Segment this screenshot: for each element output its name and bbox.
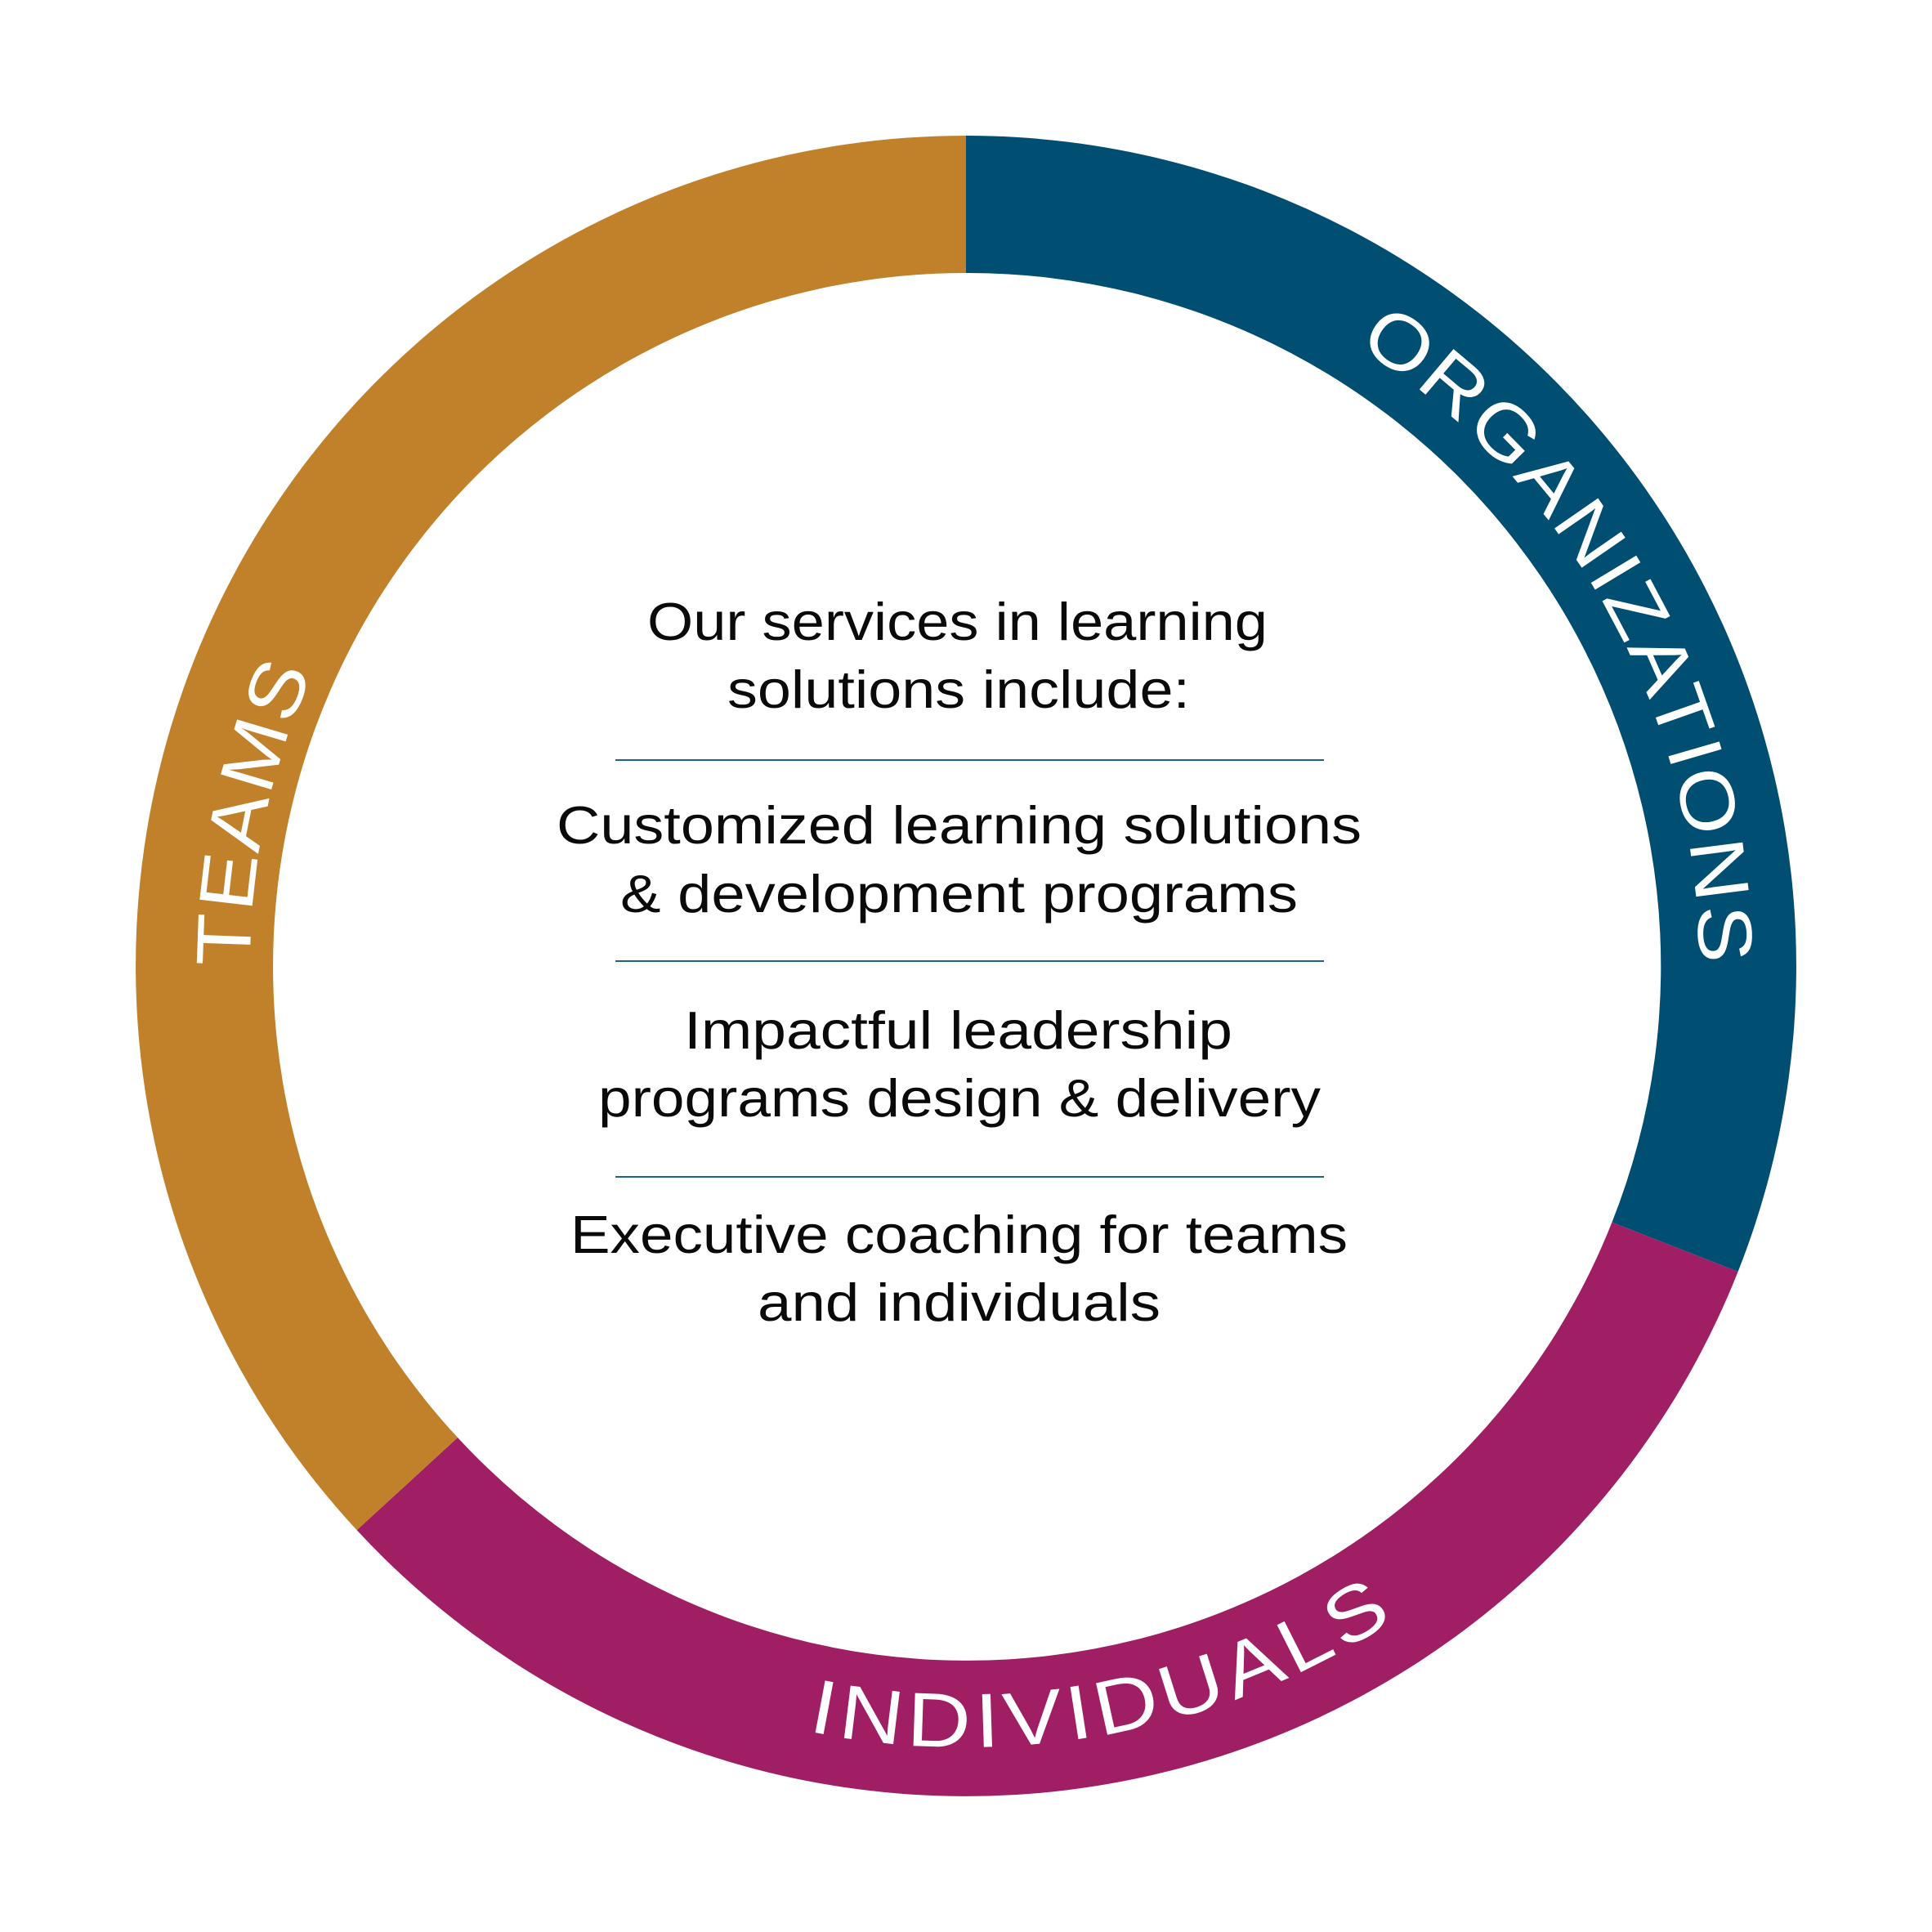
- intro heading: solutions include:: [727, 660, 1190, 719]
- service: leadership programs: [598, 1000, 1322, 1128]
- service: leadership programs: Impactful leadership: [684, 1000, 1232, 1060]
- service: customized learning: Customized learning solutions: [557, 795, 1362, 855]
- intro heading: [647, 592, 1268, 719]
- label: organizations: ORGANIZATIONS: [1370, 314, 1752, 959]
- label: teams: TEAMS: [196, 662, 306, 964]
- center text block: [557, 592, 1362, 1332]
- ring segment: individuals: [356, 1223, 1738, 1796]
- service: leadership programs: programs design & delivery: [598, 1068, 1322, 1128]
- ring segment: organizations: [966, 136, 1796, 1272]
- service: executive coaching: and individuals: [758, 1272, 1161, 1332]
- service: customized learning: [557, 795, 1362, 924]
- intro heading: Our services in learning: [647, 592, 1268, 651]
- service: executive coaching: Executive coaching for teams: [570, 1205, 1348, 1264]
- label: individuals: INDIVIDUALS: [816, 1584, 1385, 1747]
- service: customized learning: & development programs: [620, 864, 1298, 924]
- service: executive coaching: [570, 1205, 1348, 1332]
